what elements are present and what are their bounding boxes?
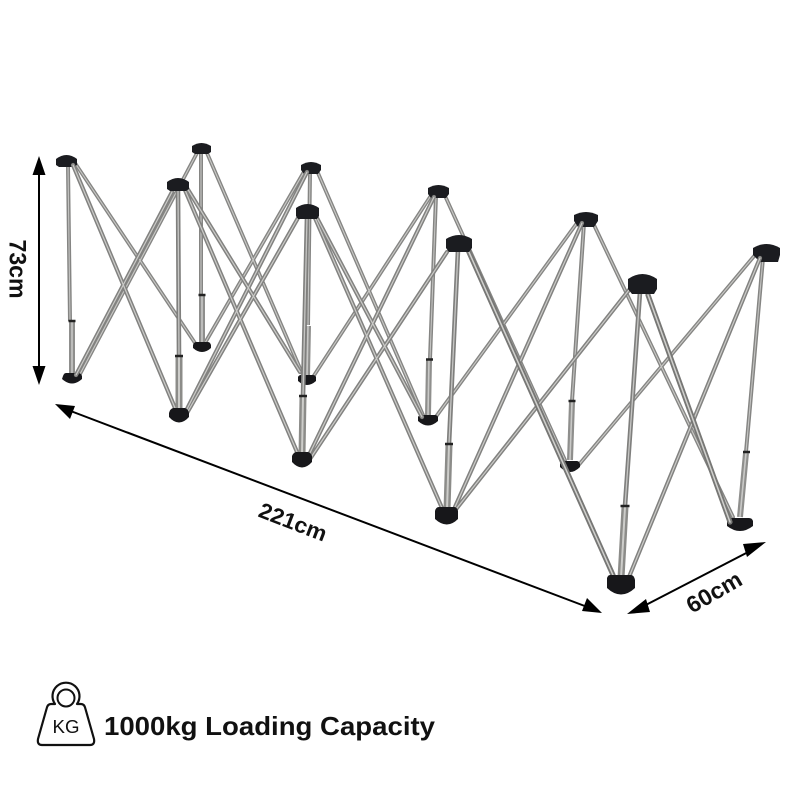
folding stage riser frame (56, 143, 780, 594)
feet: front row (169, 408, 635, 594)
label: 221cm: 221cm (255, 498, 331, 546)
label: 60cm: 60cm (682, 566, 746, 618)
vertical legs: back row (68, 152, 763, 517)
vertical legs: front row (175, 190, 640, 578)
feet: back row (62, 342, 753, 531)
icon text: KG: KG (52, 717, 80, 737)
length dimension arrow (55, 404, 602, 613)
icon: KG weight (38, 683, 94, 745)
width dimension arrow (627, 542, 766, 614)
caps: back row (56, 143, 780, 262)
capacity caption: 1000kg Loading Capacity (104, 711, 436, 741)
label: 73cm: 73cm (4, 240, 30, 298)
caps: front row (167, 178, 657, 294)
diagonal rods: front panel (73, 165, 760, 577)
height dimension arrow (32, 156, 46, 385)
diagonal rods: back panel (75, 153, 755, 517)
